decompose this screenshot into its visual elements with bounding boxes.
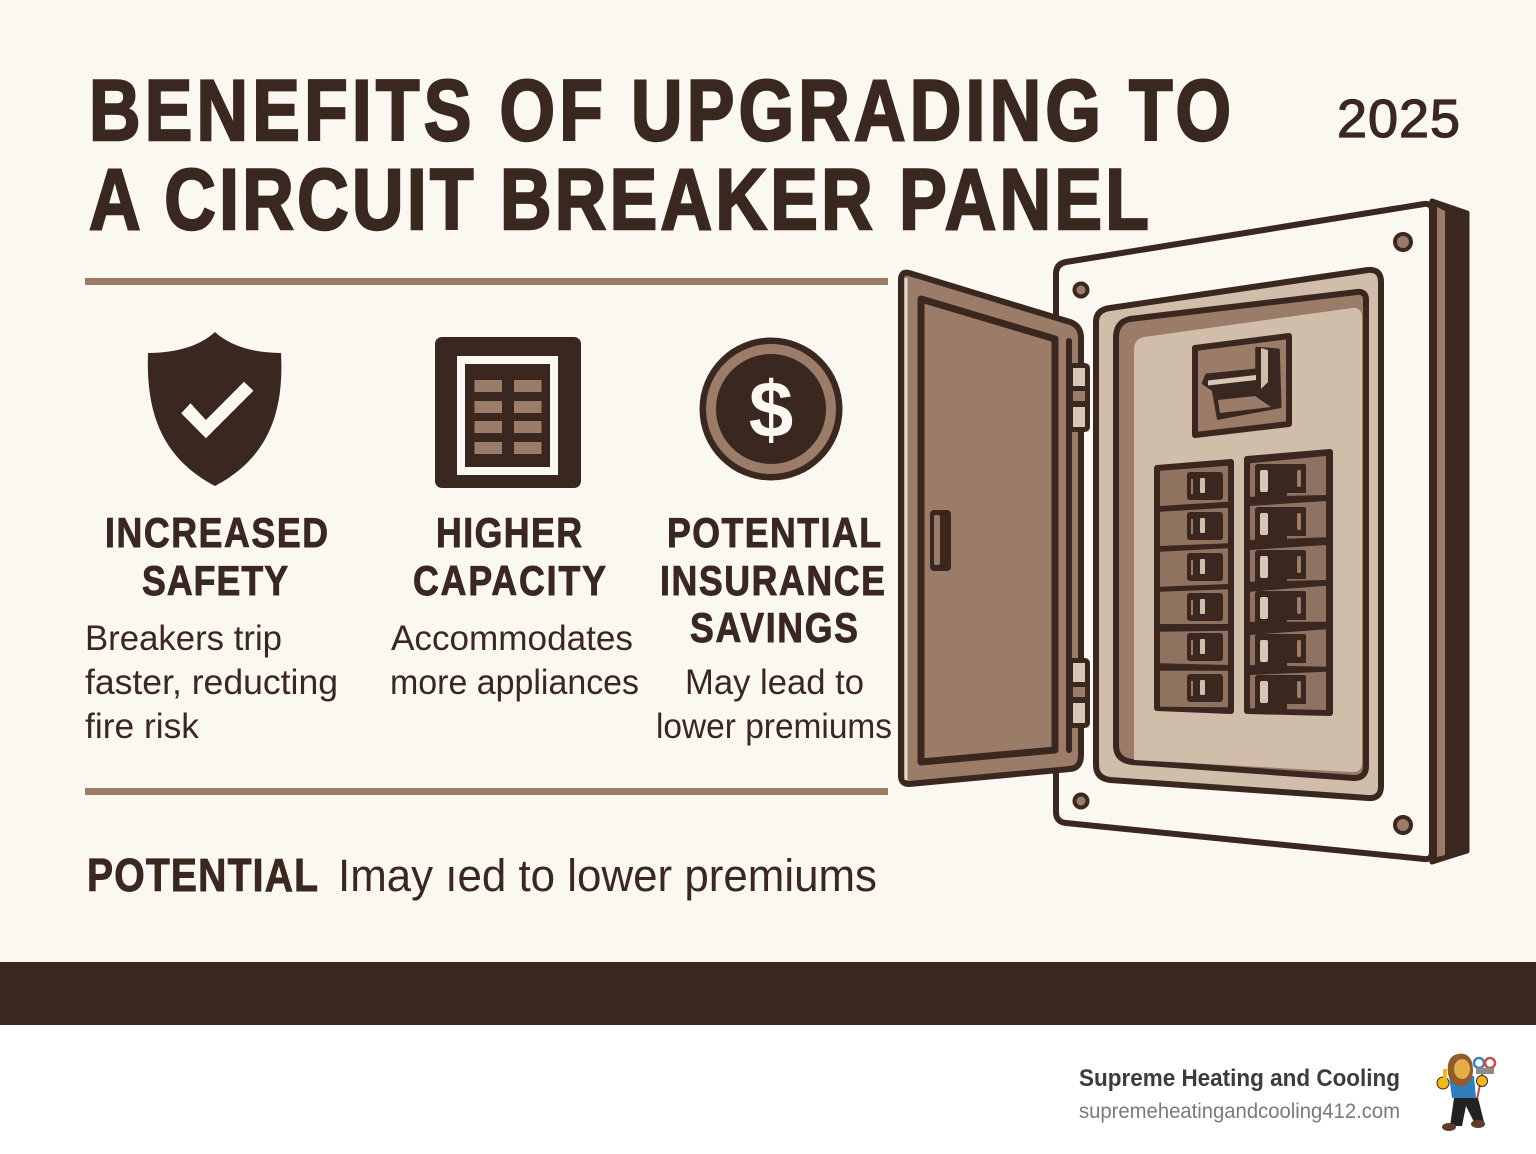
- icon: breaker panel: [435, 337, 581, 488]
- heading: [413, 510, 606, 605]
- heading: SAVINGS: [690, 605, 858, 652]
- benefit: potential insurance savings: [656, 338, 892, 746]
- footer brand: supremeheatingandcooling412.com: [1079, 1100, 1400, 1123]
- icon: dollar coin: $: [749, 365, 793, 454]
- description: [656, 663, 892, 746]
- heading: INSURANCE: [660, 558, 885, 605]
- description: Breakers trip: [85, 619, 282, 658]
- footer brand: Supreme Heating and Cooling: [1079, 1065, 1400, 1092]
- title: A CIRCUIT BREAKER PANEL: [89, 151, 1149, 247]
- heading: [105, 510, 328, 605]
- frame: [1096, 270, 1381, 798]
- heading: HIGHER: [436, 510, 582, 557]
- panel side: [1432, 201, 1467, 862]
- lower hinge: [1072, 658, 1090, 728]
- right breaker column: [1247, 452, 1330, 713]
- main switch: [1195, 336, 1289, 435]
- heading: CAPACITY: [413, 558, 606, 605]
- door: [901, 273, 1081, 784]
- footer brand: [1079, 1065, 1400, 1123]
- description: May lead to: [685, 663, 864, 702]
- mounting plate: [1056, 204, 1432, 859]
- bottom note: POTENTIAL: [87, 850, 318, 902]
- illustration: open breaker panel: [901, 201, 1467, 862]
- icon: dollar coin: [700, 338, 842, 480]
- description: faster, reducting: [85, 663, 338, 702]
- icon: lion mascot: [1437, 1054, 1495, 1131]
- heading: INCREASED: [105, 510, 328, 557]
- title: [89, 62, 1231, 247]
- upper hinge: [1072, 363, 1090, 432]
- benefit: increased safety: [85, 332, 338, 746]
- bottom note: Imay ıed to lower premiums: [338, 850, 877, 901]
- description: Accommodates: [391, 619, 633, 658]
- year label: 2025: [1337, 89, 1460, 149]
- icon: shield with check: [148, 332, 281, 486]
- description: more appliances: [390, 663, 639, 702]
- heading: [660, 510, 885, 652]
- description: fire risk: [85, 707, 199, 746]
- description: [390, 619, 639, 702]
- description: lower premiums: [656, 707, 892, 746]
- screws: [1074, 234, 1411, 833]
- left breaker column: [1157, 462, 1231, 711]
- benefit: higher capacity: [390, 337, 639, 702]
- dark band: [0, 962, 1536, 1025]
- inner recess: [1116, 292, 1366, 778]
- description: [85, 619, 338, 746]
- heading: POTENTIAL: [667, 510, 881, 557]
- bottom note: [87, 850, 877, 902]
- heading: SAFETY: [142, 558, 288, 605]
- title: BENEFITS OF UPGRADING TO: [89, 62, 1231, 158]
